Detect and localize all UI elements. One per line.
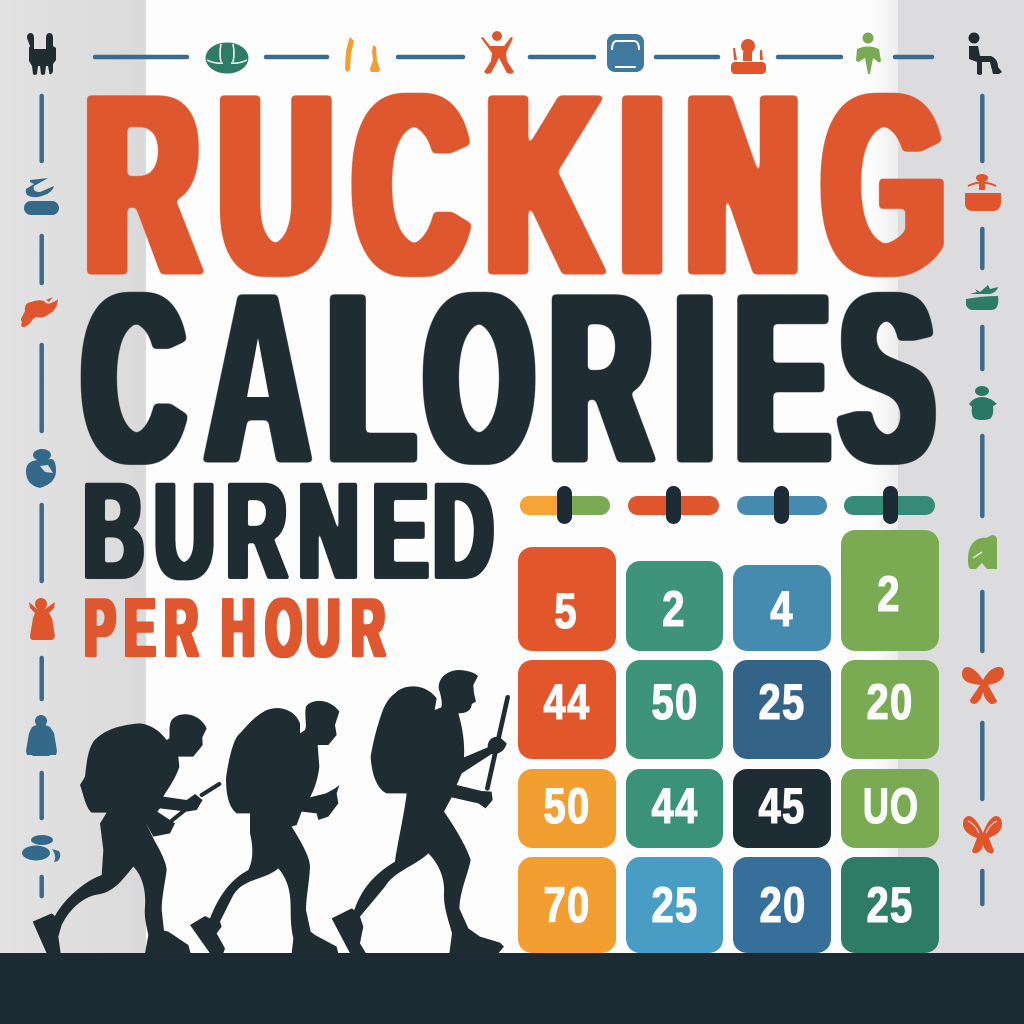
icon: blue stones (22, 835, 60, 862)
icon: blue pot (26, 449, 56, 488)
icon: green pad (966, 285, 998, 310)
grid values: 4 (770, 581, 794, 637)
grid cells (518, 530, 939, 953)
grid values (544, 566, 919, 933)
grid values: 2 (662, 581, 686, 637)
grid values: UO (863, 779, 919, 834)
icon: red raised arms figure (29, 598, 55, 640)
icon: blue rounded square (607, 34, 644, 72)
legend sliders (520, 486, 935, 524)
icon: arms raised figure (27, 33, 56, 75)
grid values: 25 (759, 674, 805, 730)
grid values: 44 (652, 778, 698, 834)
grid values: 25 (867, 877, 913, 933)
icon: resting board (24, 178, 59, 215)
icon: red jumping person (481, 31, 514, 74)
icon: red butterfly (963, 816, 1002, 853)
slider 2 (628, 486, 719, 524)
heading: PER HOUR: PER HOUR (84, 582, 385, 675)
icon: red splash (21, 297, 58, 327)
grid values: 20 (867, 674, 913, 730)
dashed icon border (42, 57, 982, 904)
grid values: 5 (554, 583, 578, 639)
hiker 3 (332, 670, 508, 953)
slider 3 (737, 486, 827, 524)
grid values: 70 (544, 877, 590, 933)
heading: BURNED: BURNED (83, 455, 493, 608)
grid values: 25 (652, 877, 698, 933)
grid values: 50 (544, 778, 590, 834)
icon: teal figure (969, 386, 997, 420)
ground bar (0, 953, 1024, 1024)
grid values: 44 (544, 674, 590, 730)
icon: orange figures (345, 37, 380, 72)
grid values: 2 (877, 566, 901, 622)
hiker 2 (190, 701, 339, 953)
icon: green person (856, 32, 881, 74)
grid values: 45 (759, 778, 805, 834)
icon: red bow (962, 667, 1004, 704)
title: RUCKING: RUCKING (86, 41, 944, 327)
hiker 1 (33, 714, 219, 953)
icon: red seated figure (731, 39, 766, 74)
calorie grid (518, 530, 939, 953)
slider 1 (520, 486, 610, 524)
grid values: 20 (760, 877, 806, 933)
hikers silhouettes (33, 670, 508, 953)
top icon row (27, 31, 1002, 75)
slider 4 (844, 486, 935, 524)
icon: green ball (206, 42, 248, 74)
grid values: 50 (652, 674, 698, 730)
right icon column (962, 174, 1004, 853)
icon: blue jacket (26, 715, 57, 756)
icon: green backpack (968, 535, 997, 569)
left icon column (21, 178, 60, 862)
icon: dark seated figure (968, 32, 1002, 75)
icon: red basket (965, 174, 1001, 211)
title: CALORIES: CALORIES (83, 243, 933, 512)
